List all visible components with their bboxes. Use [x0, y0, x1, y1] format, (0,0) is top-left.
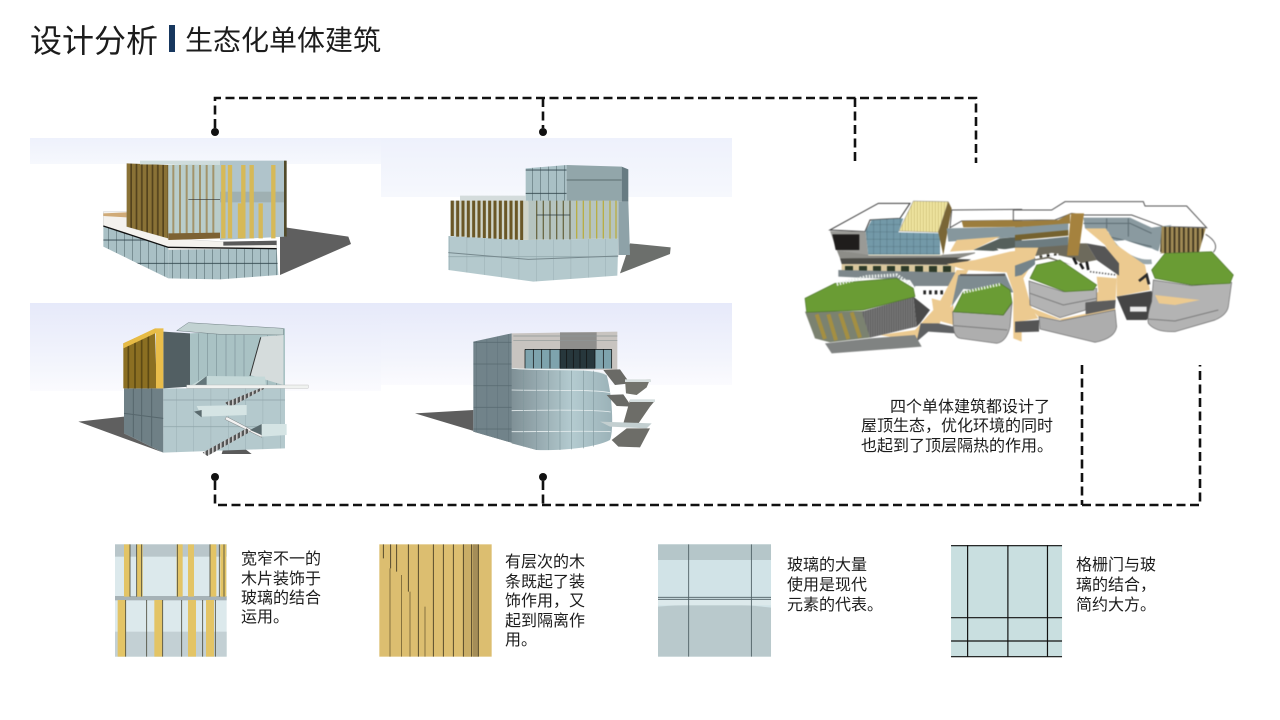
caption 2: 有层次的木: [505, 553, 585, 571]
text: green roof note: 也起到了顶层隔热的作用。: [861, 437, 1053, 455]
caption 2: 条既起了装: [505, 573, 585, 591]
aerial: west half: [805, 201, 1022, 353]
green roof block B: [953, 283, 1012, 343]
caption 1: 玻璃的结合: [241, 589, 321, 607]
caption 3: 元素的代表。: [787, 596, 883, 614]
aerial model of the complex with green roofs: [805, 201, 1233, 353]
material swatch: layered wood strips: [379, 544, 492, 657]
text: green roof note: 四个单体建筑都设计了: [890, 398, 1050, 416]
text: green roof note: [861, 398, 1053, 455]
title: [30, 23, 381, 59]
caption 3: 玻璃的大量: [787, 556, 867, 574]
material swatch: wood slats and glass: [115, 544, 227, 657]
green roof block C: [1028, 260, 1117, 342]
green roof block A: [805, 275, 930, 353]
caption 3: 使用是现代: [787, 576, 867, 594]
material swatch: glass: [658, 544, 771, 657]
caption 1: [241, 550, 321, 626]
title: 设计分析: [30, 23, 158, 59]
sky backdrops: [30, 138, 732, 391]
caption 4: 璃的结合，: [1076, 576, 1156, 594]
caption 2: 起到隔离作: [505, 612, 585, 630]
building model 3: cube with stairs: [78, 323, 308, 456]
caption 1: 运用。: [241, 608, 289, 626]
upper dashed connector: [215, 98, 976, 163]
caption 1: 木片装饰于: [241, 570, 321, 588]
caption 4: 简约大方。: [1076, 596, 1156, 614]
building model 4: curved drum with stairs: [415, 332, 655, 450]
text: green roof note: 屋顶生态，优化环境的同时: [861, 416, 1053, 435]
caption 4: [1076, 556, 1156, 614]
material swatch: grille door and glass: [951, 545, 1062, 657]
upper connector dots: [211, 128, 547, 136]
caption 2: 饰作用，又: [505, 592, 585, 610]
green roof block D: [1117, 252, 1233, 332]
lower dashed connector: [215, 365, 1200, 505]
building model 1: wood fins and glass: [103, 161, 351, 279]
lower connector dots: [211, 473, 547, 481]
title: 生态化单体建筑: [185, 25, 381, 56]
caption 2: 用。: [505, 632, 537, 649]
caption 4: 格栅门与玻: [1076, 556, 1156, 574]
caption 3: [787, 556, 883, 614]
building model 2: terrace with wood screen: [448, 165, 671, 282]
caption 1: 宽窄不一的: [241, 550, 321, 568]
aerial: east half: [1013, 202, 1233, 342]
caption 2: [505, 553, 585, 649]
